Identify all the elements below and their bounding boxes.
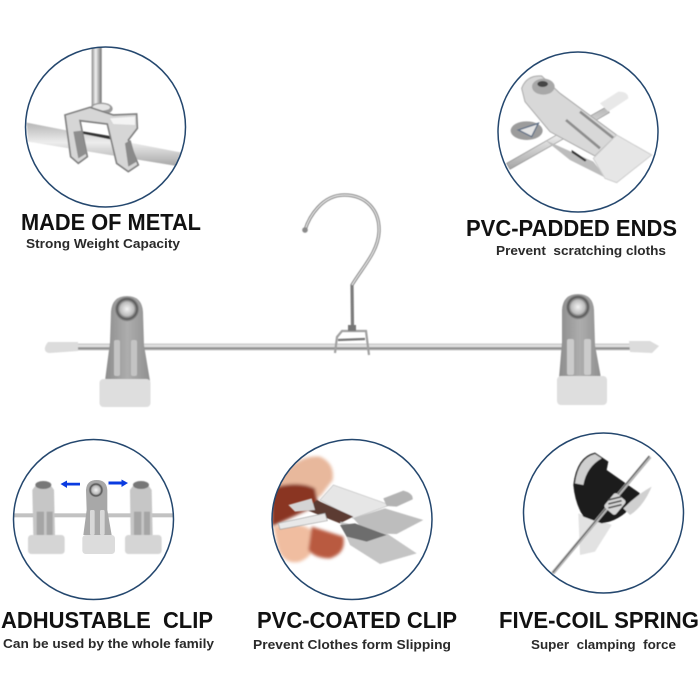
photo: metal bracket — [27, 47, 182, 172]
subheading: Can be used by the whole family — [3, 636, 215, 651]
panel: pvc-coated clip — [253, 440, 457, 652]
arrow: left — [60, 480, 80, 488]
arrow: right — [108, 480, 128, 487]
photo: fingers squeezing clip — [272, 456, 423, 564]
photo: spring and rod — [553, 453, 652, 573]
photo: three clips — [13, 480, 173, 554]
hanger bar — [78, 344, 630, 350]
circle outline — [524, 433, 684, 593]
heading: ADHUSTABLE CLIP — [1, 607, 213, 633]
subheading: Strong Weight Capacity — [26, 236, 181, 251]
right clip — [557, 294, 607, 405]
left clip — [100, 296, 150, 407]
right end cap — [629, 341, 659, 353]
panel: five-coil spring — [499, 433, 699, 652]
subheading: Prevent Clothes form Slipping — [253, 637, 451, 652]
heading: PVC-COATED CLIP — [257, 607, 457, 633]
subheading: Super clamping force — [531, 637, 676, 652]
subheading: Prevent scratching cloths — [496, 243, 666, 258]
panel: made of metal — [21, 47, 201, 251]
left end cap — [45, 342, 78, 353]
heading: PVC-PADDED ENDS — [466, 215, 677, 241]
bracket — [335, 325, 369, 355]
circle outline — [26, 47, 186, 207]
circle outline — [498, 52, 658, 212]
panel: adjustable clip — [1, 440, 215, 651]
heading: MADE OF METAL — [21, 209, 201, 235]
circle outline — [14, 440, 174, 600]
circle outline — [272, 440, 432, 600]
photo: padded clip — [507, 76, 652, 183]
main product: clip hanger — [45, 195, 659, 407]
hook — [302, 195, 379, 328]
panel: pvc-padded ends — [466, 52, 677, 258]
